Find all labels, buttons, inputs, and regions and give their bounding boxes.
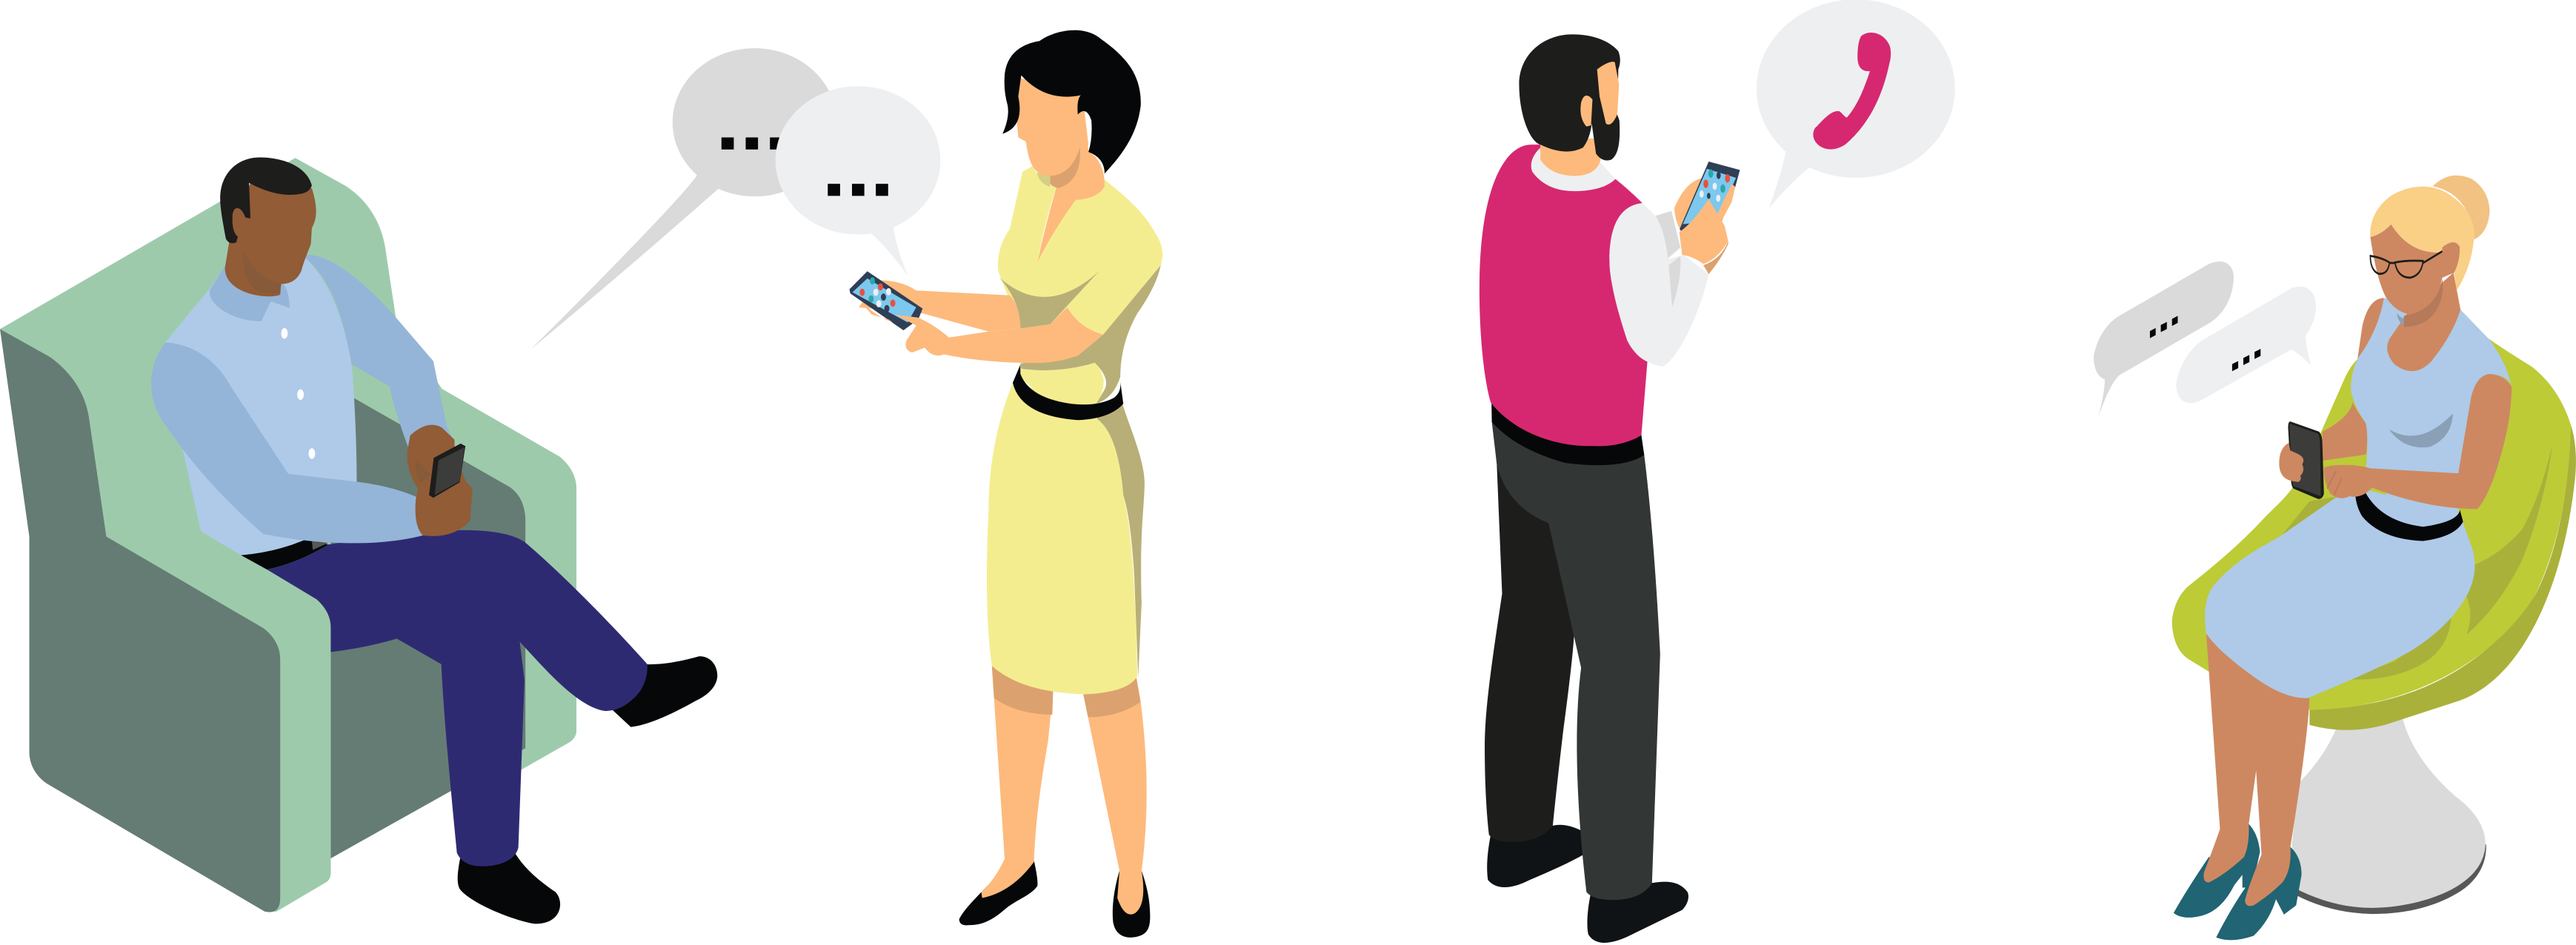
smartphone and hands — [1674, 161, 1740, 274]
man's head — [220, 157, 316, 296]
left forearm — [2323, 402, 2367, 461]
phone-call speech bubble — [1757, 0, 1955, 208]
glasses — [2370, 251, 2443, 278]
belt — [1491, 403, 1644, 465]
smartphone and hand — [2279, 421, 2324, 499]
yellow skirt — [987, 380, 1145, 694]
light speech bubble — [776, 86, 940, 276]
figure: blonde woman seated in lime chair — [2094, 176, 2576, 940]
grey speech bubble — [2094, 261, 2234, 416]
man's far arm — [304, 255, 455, 449]
woman's neck and chest — [1029, 90, 1105, 262]
belt — [2355, 492, 2463, 541]
shirt collar — [210, 263, 290, 321]
woman's head — [1002, 30, 1141, 188]
man's near arm — [151, 342, 423, 543]
icon: telephone handset — [1813, 33, 1891, 150]
blue skirt — [2205, 484, 2475, 698]
white collar — [1531, 147, 1616, 191]
grey speech bubble — [530, 48, 836, 350]
figure: man seated in green armchair — [0, 157, 717, 924]
man's trousers — [1485, 422, 1660, 900]
head — [2370, 176, 2489, 327]
pointing arm — [2323, 374, 2512, 509]
neck and chest — [2387, 273, 2460, 371]
man's shoes — [1487, 825, 1688, 943]
shirt buttons — [281, 328, 315, 459]
armchair — [0, 158, 576, 912]
neck — [1540, 138, 1600, 176]
blue dress top — [2351, 298, 2512, 514]
woman's shoes — [959, 861, 1150, 938]
smartphone held by woman — [850, 271, 1103, 363]
light speech bubble — [2176, 287, 2316, 403]
yellow bodice — [998, 166, 1162, 404]
white sleeve — [1609, 203, 1708, 367]
man's shirt — [165, 257, 416, 555]
lime egg chair seat — [2172, 338, 2576, 730]
man's hands and phone — [407, 425, 473, 536]
figure: woman in yellow dress with speech bubbles — [530, 30, 1162, 938]
woman's legs — [981, 666, 1147, 915]
left shoulder — [2357, 298, 2384, 359]
man's trousers and belt — [241, 530, 717, 924]
chair pedestal base — [2292, 718, 2486, 914]
pink vest — [1480, 144, 1648, 446]
man's head with hair and beard — [1519, 34, 1620, 161]
figure: man in pink vest — [1480, 0, 1955, 943]
black belt — [1013, 364, 1123, 420]
legs — [2203, 633, 2309, 906]
shoes — [2174, 824, 2302, 940]
